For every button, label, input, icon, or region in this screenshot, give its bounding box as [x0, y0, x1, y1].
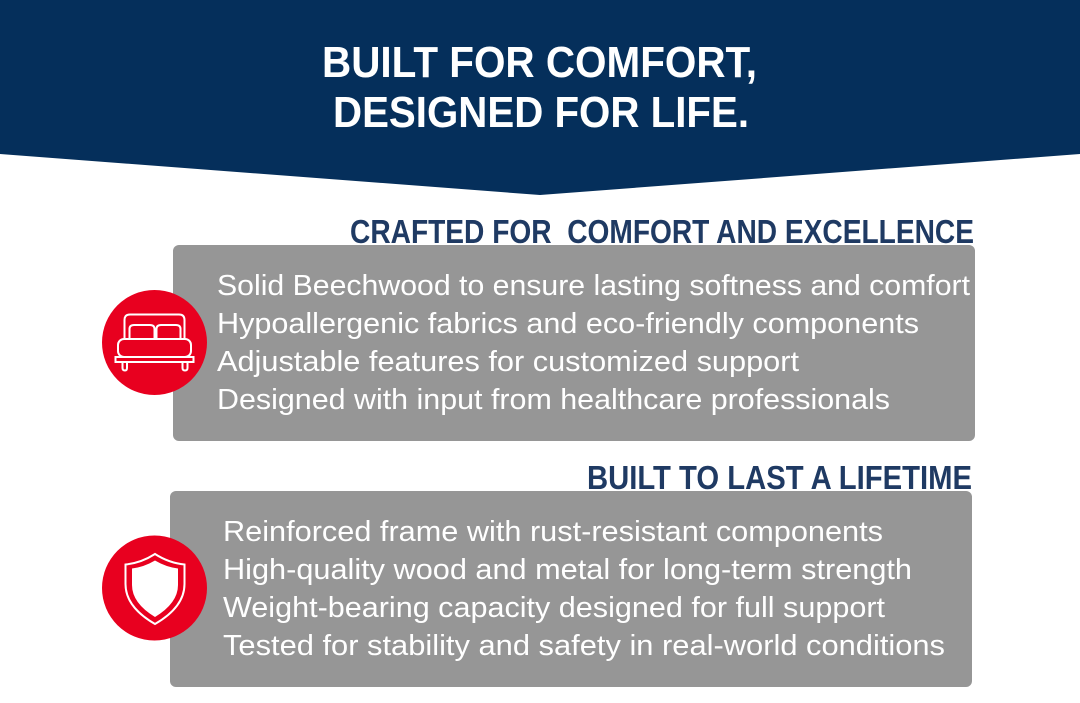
- panel: crafted for comfort: [102, 213, 975, 441]
- panel heading: built to last a lifetime: BUILT TO LAST A LIFETIME: [587, 459, 972, 496]
- durability feature list: Tested for stability and safety in real-world conditions: [223, 630, 945, 662]
- panel heading: crafted for comfort and excellence: CRAFTED FOR COMFORT AND EXCELLENCE: [350, 213, 974, 250]
- title: BUILT FOR COMFORT,: [322, 39, 757, 87]
- comfort feature list: Designed with input from healthcare professionals: [217, 384, 890, 416]
- durability feature list: Weight-bearing capacity designed for full support: [223, 592, 885, 624]
- comfort feature list: Hypoallergenic fabrics and eco-friendly components: [217, 308, 919, 340]
- durability feature list: High-quality wood and metal for long-term strength: [223, 554, 912, 586]
- title: DESIGNED FOR LIFE.: [333, 89, 749, 137]
- comfort feature list: [217, 270, 970, 416]
- comfort feature list: Solid Beechwood to ensure lasting softness and comfort: [217, 270, 970, 302]
- panel background: comfort: [173, 245, 975, 441]
- comfort feature list: Adjustable features for customized support: [217, 346, 799, 378]
- title: [322, 39, 757, 137]
- header banner: [0, 0, 1080, 195]
- icon: shield: [102, 536, 207, 640]
- panel background: durability: [170, 491, 972, 687]
- durability feature list: [223, 516, 945, 662]
- panel: built to last: [102, 459, 972, 687]
- durability feature list: Reinforced frame with rust-resistant components: [223, 516, 883, 548]
- icon: bed: [102, 290, 207, 395]
